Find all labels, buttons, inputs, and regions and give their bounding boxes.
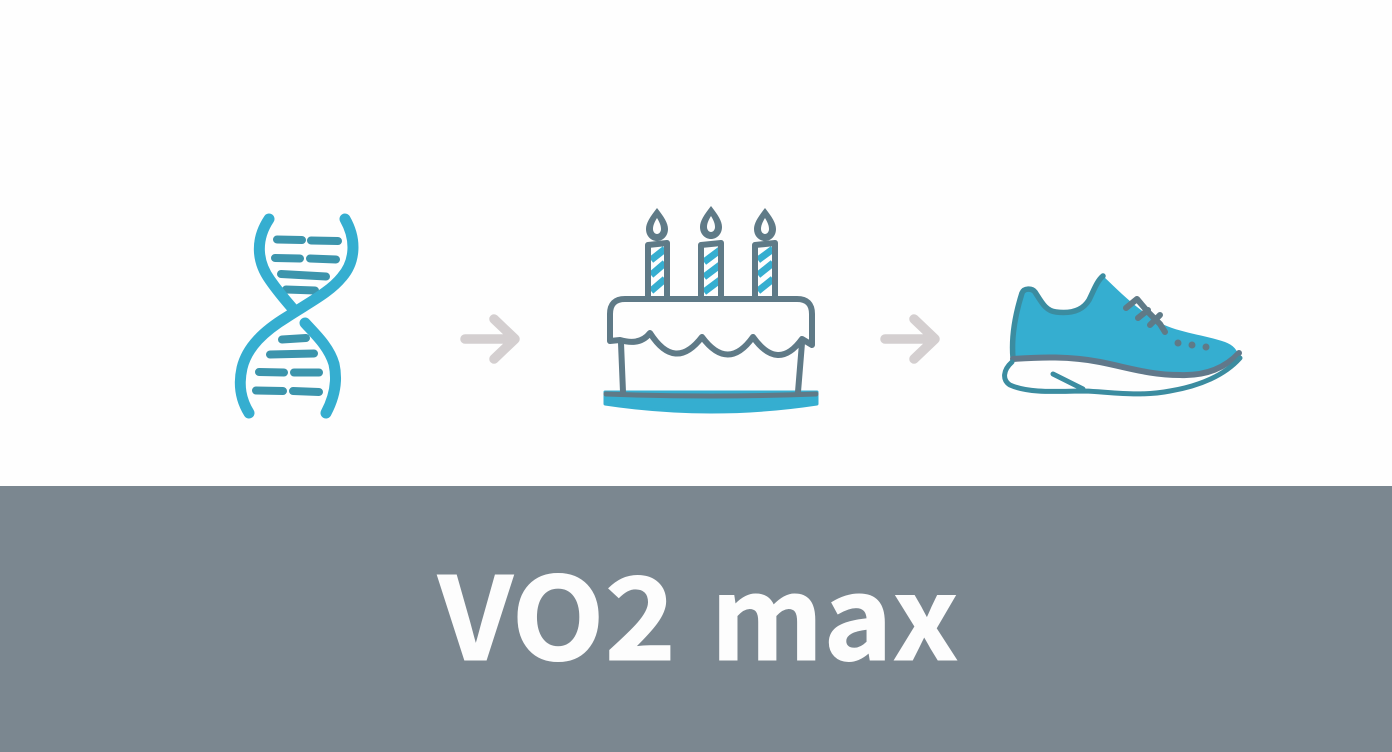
outsole: [1005, 358, 1240, 394]
cake tiers: [610, 299, 812, 392]
shoe upper: [1013, 276, 1239, 375]
sole line: [1013, 353, 1239, 375]
eyelets: [1174, 340, 1210, 350]
arrow: cake to shoe: [885, 319, 935, 359]
icon: running shoe: [1005, 276, 1240, 394]
plate rim: [606, 394, 816, 396]
laces: [1126, 299, 1165, 332]
icon: DNA helix: [240, 219, 353, 413]
shoe collar outline: [1013, 276, 1103, 358]
title: max: [710, 528, 958, 694]
DNA strand descending: [259, 219, 336, 413]
candle 2: [700, 206, 722, 297]
candle 3: [754, 208, 776, 297]
panel: title band: [0, 486, 1392, 752]
arrow: DNA to cake: [465, 319, 515, 359]
icon: birthday cake: [605, 206, 817, 412]
candle 1: [646, 208, 668, 297]
cake plate: [605, 392, 817, 412]
DNA strand ascending: [240, 219, 353, 413]
title: [437, 528, 959, 694]
title: VO2: [437, 528, 676, 694]
DNA rungs: [256, 240, 338, 392]
